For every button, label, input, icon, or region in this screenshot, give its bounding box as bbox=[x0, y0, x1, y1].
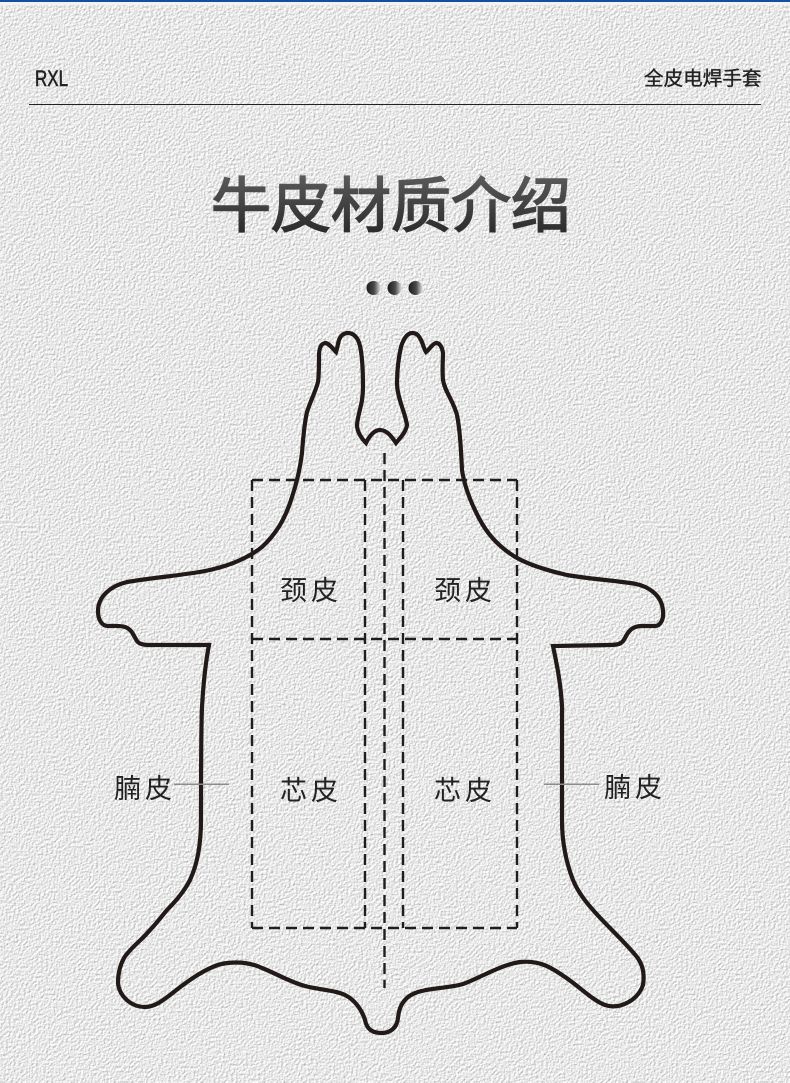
header rule bbox=[29, 104, 761, 105]
dashed cutting lines bbox=[252, 453, 517, 988]
label: right core hide: 芯皮 bbox=[434, 776, 496, 806]
label: right belly hide with leader bbox=[544, 773, 666, 803]
decorative three dots bbox=[366, 281, 422, 295]
title: 牛皮材质介绍 bbox=[211, 173, 571, 240]
label: left neck hide: 颈皮 bbox=[280, 576, 342, 606]
label: left belly hide with leader bbox=[114, 774, 229, 804]
header brand: RXL: RXL bbox=[35, 66, 68, 91]
top blue bar bbox=[0, 0, 790, 5]
header product name: 全皮电焊手套 bbox=[644, 68, 762, 90]
label: left belly hide with leader: 腩皮 bbox=[114, 774, 176, 804]
cowhide outline bbox=[98, 333, 663, 1033]
label: left core hide: 芯皮 bbox=[280, 776, 342, 806]
label: right belly hide with leader: 腩皮 bbox=[604, 773, 666, 803]
label: right neck hide: 颈皮 bbox=[434, 576, 496, 606]
